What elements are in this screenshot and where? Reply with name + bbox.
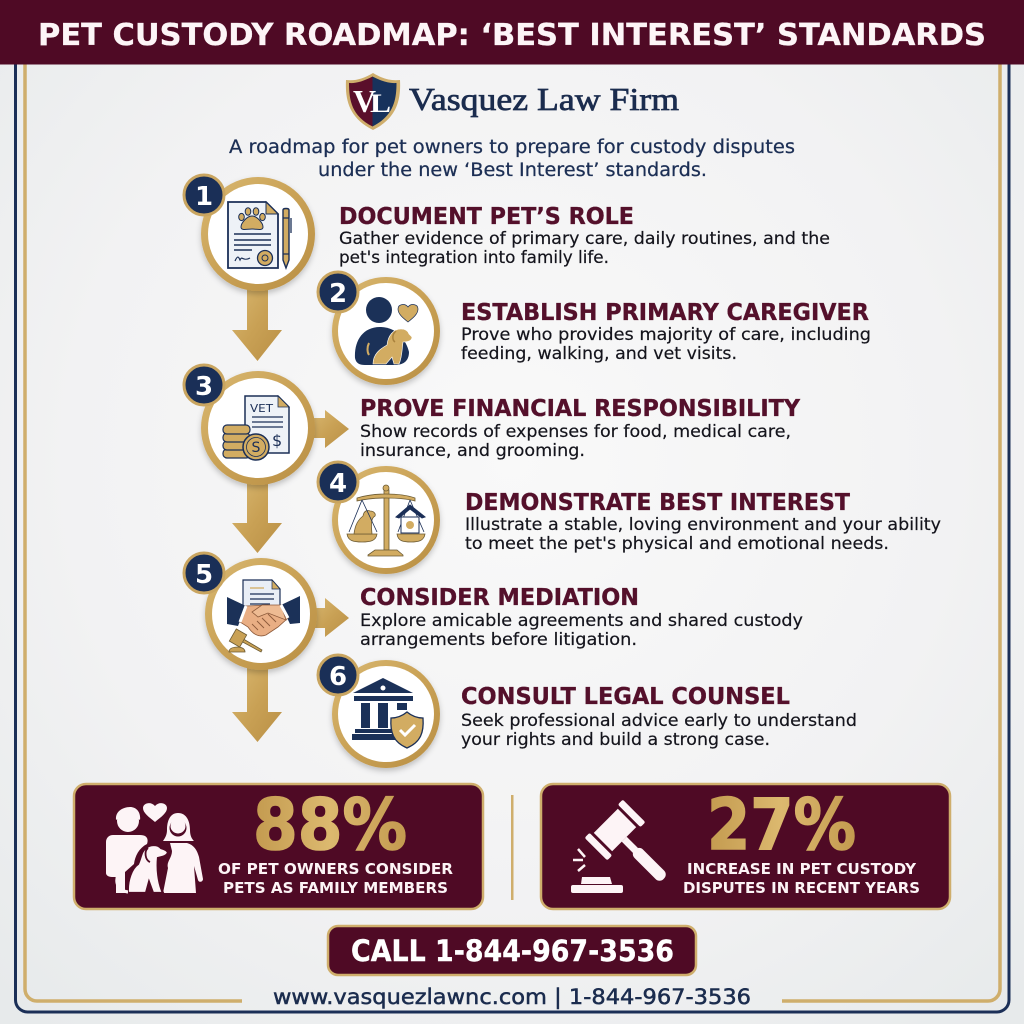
badge 5: 5 [195, 560, 213, 590]
step 6 heading: CONSULT LEGAL COUNSEL [461, 682, 790, 710]
title banner: PET CUSTODY ROADMAP: ‘BEST INTEREST’ STANDARDS [38, 18, 986, 53]
stat caption: OF PET OWNERS CONSIDER [218, 860, 453, 878]
step 1 description: Gather evidence of primary care, daily routines, and the [339, 229, 830, 249]
arrow: step 5 down [232, 665, 282, 742]
badge 4 [318, 462, 358, 502]
step 2 description [461, 325, 871, 364]
logo: Vasquez Law Firm: Vasquez Law Firm [409, 81, 679, 117]
stat panel: 88% [74, 784, 483, 909]
badge 1: 1 [195, 182, 213, 212]
badge 3 [184, 365, 224, 405]
badge 2: 2 [329, 279, 347, 309]
step 3 description [360, 422, 791, 461]
intro text: under the new ‘Best Interest’ standards. [318, 160, 707, 181]
call button: CALL 1-844-967-3536 [351, 934, 674, 968]
badge 1 [184, 175, 224, 215]
circle icon: vet bill and coins: $ [272, 431, 282, 450]
circle icon: vet bill and coins: VET [250, 402, 273, 415]
title banner [0, 0, 1024, 64]
step 5 description: Explore amicable agreements and shared custody [360, 611, 803, 631]
icon: family with dog [106, 803, 203, 893]
stat number: 88% [253, 784, 407, 866]
call button [328, 926, 696, 975]
step 3 [184, 365, 801, 485]
arrow: step 3 right [310, 410, 349, 448]
icon: shield [346, 73, 400, 130]
logo: Vasquez Law Firm [346, 73, 679, 130]
step 1 description [339, 229, 830, 268]
step 1 heading: DOCUMENT PET’S ROLE [339, 202, 634, 230]
stat caption: INCREASE IN PET CUSTODY [687, 860, 917, 878]
stat panel: 27% [541, 784, 950, 909]
arrow: step 1 to 3 [232, 285, 282, 361]
step 5 description [360, 611, 803, 650]
arrow: step 3 to 5 [232, 480, 282, 553]
stat caption: DISPUTES IN RECENT YEARS [683, 879, 920, 897]
step 3 heading: PROVE FINANCIAL RESPONSIBILITY [360, 394, 801, 422]
stat caption [218, 860, 453, 897]
website and phone: www.vasquezlawnc.com | 1-844-967-3536 [273, 985, 751, 1010]
badge 6 [318, 655, 358, 695]
step 5 description: arrangements before litigation. [360, 630, 637, 650]
circle icon: handshake and gavel [205, 558, 317, 670]
stat caption [683, 860, 920, 897]
step 6 description: Seek professional advice early to understand [461, 711, 857, 731]
step 4 description [465, 515, 941, 554]
step 4 [318, 462, 941, 574]
badge 4: 4 [329, 469, 347, 499]
arrow: step 5 right [312, 598, 349, 637]
step 5 [184, 553, 803, 670]
stat number: 27% [707, 784, 856, 866]
badge 6: 6 [329, 662, 347, 692]
circle icon: document with paw [201, 177, 315, 291]
step 5 heading: CONSIDER MEDIATION [360, 583, 639, 611]
step 2 description: feeding, walking, and vet visits. [461, 344, 737, 364]
step 2 [318, 272, 871, 385]
intro text [229, 137, 795, 181]
circle icon: courthouse and shield [332, 660, 440, 768]
divider [511, 795, 514, 900]
circle icon: vet bill and coins [201, 371, 315, 485]
circle icon: person hugging dog [332, 277, 440, 385]
circle icon: vet bill and coins: S [252, 440, 261, 456]
icon: gavel [571, 800, 683, 898]
step 3 description: insurance, and grooming. [360, 441, 585, 461]
step 3 description: Show records of expenses for food, medical care, [360, 422, 791, 442]
step 4 description: to meet the pet's physical and emotional needs. [465, 534, 889, 554]
step 4 description: Illustrate a stable, loving environment and your ability [465, 515, 941, 535]
step 1 [184, 175, 830, 291]
icon: shield: V [353, 83, 376, 119]
step 2 description: Prove who provides majority of care, including [461, 325, 871, 345]
badge 3: 3 [195, 372, 213, 402]
step 2 heading: ESTABLISH PRIMARY CAREGIVER [461, 298, 869, 326]
circle icon: scales with dog and house [332, 466, 440, 574]
step 6 [318, 655, 857, 768]
icon: shield: L [370, 89, 391, 118]
step 6 description: your rights and build a strong case. [461, 730, 770, 750]
intro text: A roadmap for pet owners to prepare for custody disputes [229, 137, 795, 158]
badge 5 [184, 553, 224, 593]
step 4 heading: DEMONSTRATE BEST INTEREST [465, 488, 850, 516]
badge 2 [318, 272, 358, 312]
step 1 description: pet's integration into family life. [339, 248, 609, 268]
stat caption: PETS AS FAMILY MEMBERS [223, 879, 448, 897]
step 6 description [461, 711, 857, 750]
